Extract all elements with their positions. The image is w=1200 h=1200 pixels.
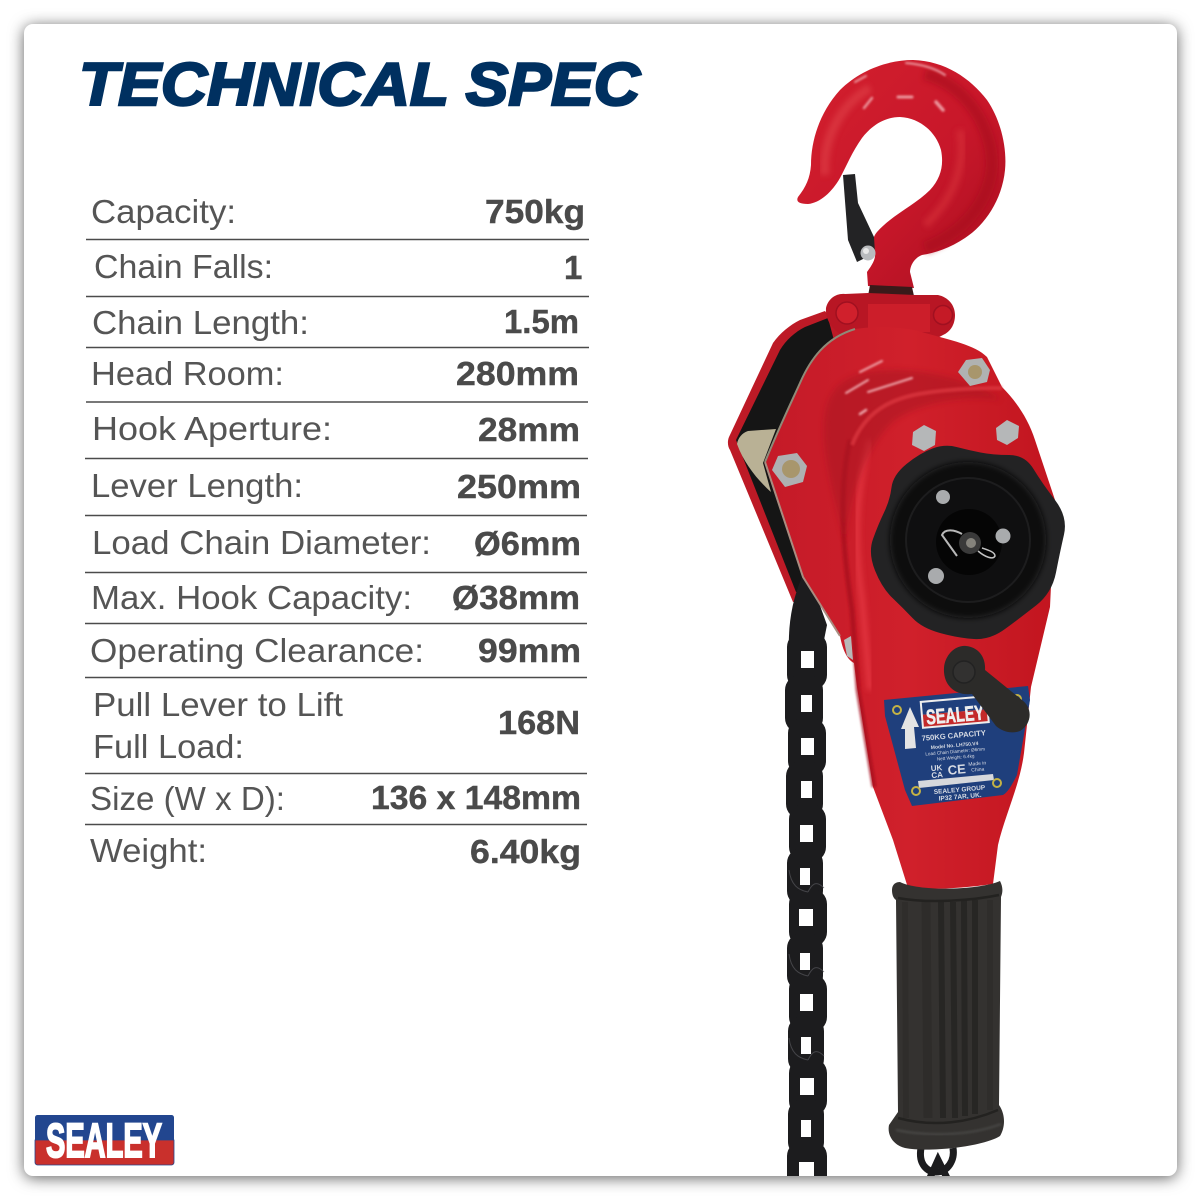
row: chain falls: Chain Falls: <box>94 248 273 285</box>
row: lever length: Lever Length: <box>91 467 303 504</box>
row: head room <box>86 355 588 402</box>
data plate text: UK <box>930 763 943 773</box>
row: head room: 280mm <box>456 355 579 392</box>
data plate text: IP32 7AR, UK. <box>938 792 982 803</box>
row: load chain diameter: Load Chain Diameter: <box>92 524 431 561</box>
row: operating clearance: 99mm <box>478 632 581 669</box>
logo: Sealey: SEALEY <box>46 1115 162 1168</box>
hook <box>797 60 1005 288</box>
row: chain length: 1.5m <box>504 303 579 340</box>
row: operating clearance: Operating Clearance: <box>90 632 424 669</box>
data plate text: CE <box>947 761 967 778</box>
grip chain end <box>920 1148 953 1180</box>
product image: lever hoist <box>728 60 1065 1199</box>
row: hook aperture: Hook Aperture: <box>92 410 332 447</box>
row: weight: Weight: <box>90 832 207 869</box>
title: TECHNICAL SPEC <box>79 51 642 118</box>
row: hook aperture <box>85 410 588 458</box>
back plate <box>728 311 840 602</box>
row: chain falls: 1 <box>564 249 582 286</box>
logo: Sealey <box>35 1115 174 1168</box>
data plate text: CA <box>931 770 943 780</box>
swivel block <box>826 285 955 342</box>
row: capacity <box>86 193 589 240</box>
data plate <box>884 686 1030 806</box>
black knob <box>871 446 1065 639</box>
row: pull lever to lift full load: Full Load: <box>93 728 244 765</box>
data plate text: Made in <box>968 760 987 768</box>
row: load chain diameter: Ø6mm <box>474 525 581 562</box>
row: pull lever to lift full load: 168N <box>498 704 580 741</box>
row: chain length: Chain Length: <box>92 304 309 341</box>
row: max hook capacity: Ø38mm <box>452 579 580 616</box>
row: capacity: Capacity: <box>91 193 236 230</box>
bolts <box>772 358 1019 660</box>
row: pull lever to lift full load <box>85 686 587 774</box>
row: size <box>85 779 587 824</box>
data plate logo <box>920 695 990 730</box>
data plate text: Model No. LH750.V4 <box>931 741 979 751</box>
row: size: Size (W x D): <box>90 780 285 817</box>
row: lever length: 250mm <box>457 468 581 505</box>
data plate logo: SEALEY <box>925 702 985 729</box>
row: capacity: 750kg <box>485 193 585 230</box>
row: weight: 6.40kg <box>470 833 581 870</box>
load chain <box>785 577 827 1199</box>
data plate text <box>922 730 986 801</box>
rubber grip <box>889 881 1004 1150</box>
row: pull lever to lift full load: Pull Lever to Lift <box>93 686 343 723</box>
row: operating clearance <box>85 632 587 678</box>
row: hook aperture: 28mm <box>478 411 580 448</box>
data plate text: Load Chain Diameter: Ø6mm <box>925 746 985 757</box>
row: head room: Head Room: <box>91 355 284 392</box>
row: max hook capacity <box>85 579 587 624</box>
row: lever length <box>85 467 587 516</box>
hook safety latch <box>843 174 876 262</box>
cam lever <box>944 646 1030 732</box>
row: size: 136 x 148mm <box>371 779 581 816</box>
row: weight <box>90 832 581 870</box>
row: load chain diameter <box>85 524 587 572</box>
row: max hook capacity: Max. Hook Capacity: <box>91 579 412 616</box>
data plate text: 750KG CAPACITY <box>921 728 986 743</box>
row: chain falls <box>86 248 589 296</box>
lever housing <box>765 327 1055 889</box>
row: chain length <box>86 303 589 348</box>
spec table <box>85 193 589 870</box>
data plate text: China <box>971 767 985 774</box>
data plate text: SEALEY GROUP <box>934 784 986 796</box>
data plate text: Nett Weight: 6.4kg <box>937 753 975 762</box>
